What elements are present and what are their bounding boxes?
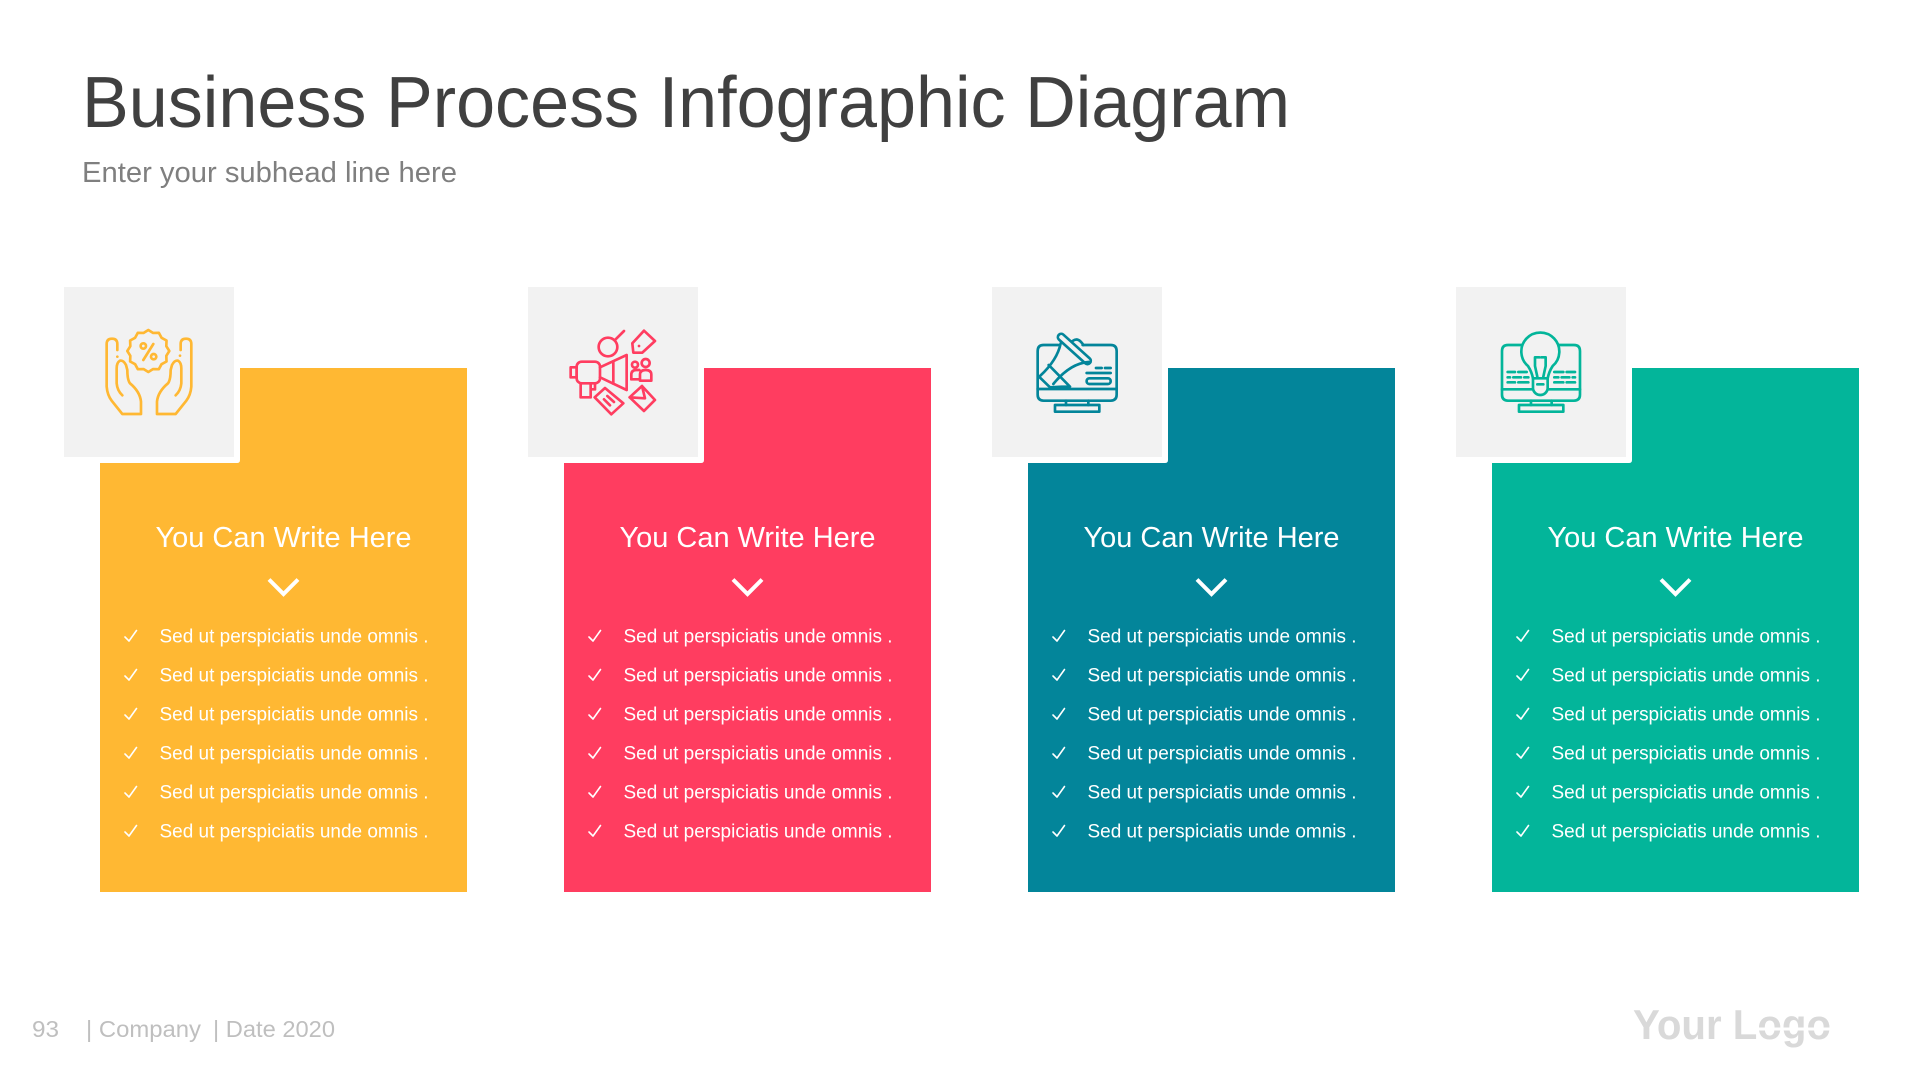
icon: monitor with light bulb (1502, 333, 1580, 412)
list item: Sed ut perspiciatis unde omnis . (160, 626, 428, 648)
list item: Sed ut perspiciatis unde omnis . (624, 744, 892, 764)
card heading: You Can Write Here (620, 522, 876, 554)
list item: Sed ut perspiciatis unde omnis . (1088, 666, 1356, 686)
list item: Sed ut perspiciatis unde omnis . (624, 822, 892, 842)
icon: megaphone with marketing items (571, 331, 655, 414)
list item: Sed ut perspiciatis unde omnis . (624, 782, 892, 804)
panel: card 1 orange (64, 287, 467, 892)
icon tile (64, 287, 234, 457)
list item: Sed ut perspiciatis unde omnis . (1552, 744, 1820, 764)
list item: Sed ut perspiciatis unde omnis . (160, 782, 428, 804)
icon: monitor with megaphone (1038, 332, 1117, 412)
list item: Sed ut perspiciatis unde omnis . (1552, 822, 1820, 842)
checklist (589, 626, 892, 842)
list item: Sed ut perspiciatis unde omnis . (160, 744, 428, 764)
list item: Sed ut perspiciatis unde omnis . (1088, 782, 1356, 804)
list item: Sed ut perspiciatis unde omnis . (1552, 704, 1820, 726)
footer: page number, company and date: | Company (86, 1016, 202, 1042)
list item: Sed ut perspiciatis unde omnis . (1088, 822, 1356, 842)
checklist (1517, 626, 1820, 842)
icon tile (1456, 287, 1626, 457)
panel: card 3 teal (992, 287, 1395, 892)
title: Business Process Infographic Diagram (82, 63, 1290, 143)
card heading: You Can Write Here (1548, 522, 1804, 554)
icon tile (992, 287, 1162, 457)
card background (1492, 368, 1859, 892)
list item: Sed ut perspiciatis unde omnis . (624, 626, 892, 648)
logo: Your Logo (1633, 1001, 1831, 1048)
panel: card 2 pink (528, 287, 931, 892)
list item: Sed ut perspiciatis unde omnis . (160, 822, 428, 842)
footer: page number, company and date: 93 (32, 1016, 59, 1042)
panel: card 4 green (1456, 287, 1859, 892)
card background (100, 368, 467, 892)
checklist (1053, 626, 1356, 842)
list item: Sed ut perspiciatis unde omnis . (160, 666, 428, 686)
card heading: You Can Write Here (1084, 522, 1340, 554)
icon: hands holding percent badge (107, 330, 191, 414)
icon tile (528, 287, 698, 457)
footer: page number, company and date: | Date 2020 (213, 1016, 335, 1042)
card heading: You Can Write Here (156, 522, 412, 554)
list item: Sed ut perspiciatis unde omnis . (1552, 626, 1820, 648)
card background (564, 368, 931, 892)
list item: Sed ut perspiciatis unde omnis . (624, 666, 892, 686)
list item: Sed ut perspiciatis unde omnis . (1552, 782, 1820, 804)
icon: chevron down (1197, 580, 1226, 594)
checklist (125, 626, 428, 842)
footer: page number, company and date (32, 1016, 335, 1042)
list item: Sed ut perspiciatis unde omnis . (1552, 666, 1820, 686)
icon: chevron down (733, 580, 762, 594)
icon: chevron down (269, 580, 298, 594)
card background (1028, 368, 1395, 892)
list item: Sed ut perspiciatis unde omnis . (1088, 704, 1356, 726)
list item: Sed ut perspiciatis unde omnis . (1088, 744, 1356, 764)
subtitle: Enter your subhead line here (82, 157, 457, 189)
list item: Sed ut perspiciatis unde omnis . (1088, 626, 1356, 648)
list item: Sed ut perspiciatis unde omnis . (160, 704, 428, 726)
list item: Sed ut perspiciatis unde omnis . (624, 704, 892, 726)
icon: chevron down (1661, 580, 1690, 594)
